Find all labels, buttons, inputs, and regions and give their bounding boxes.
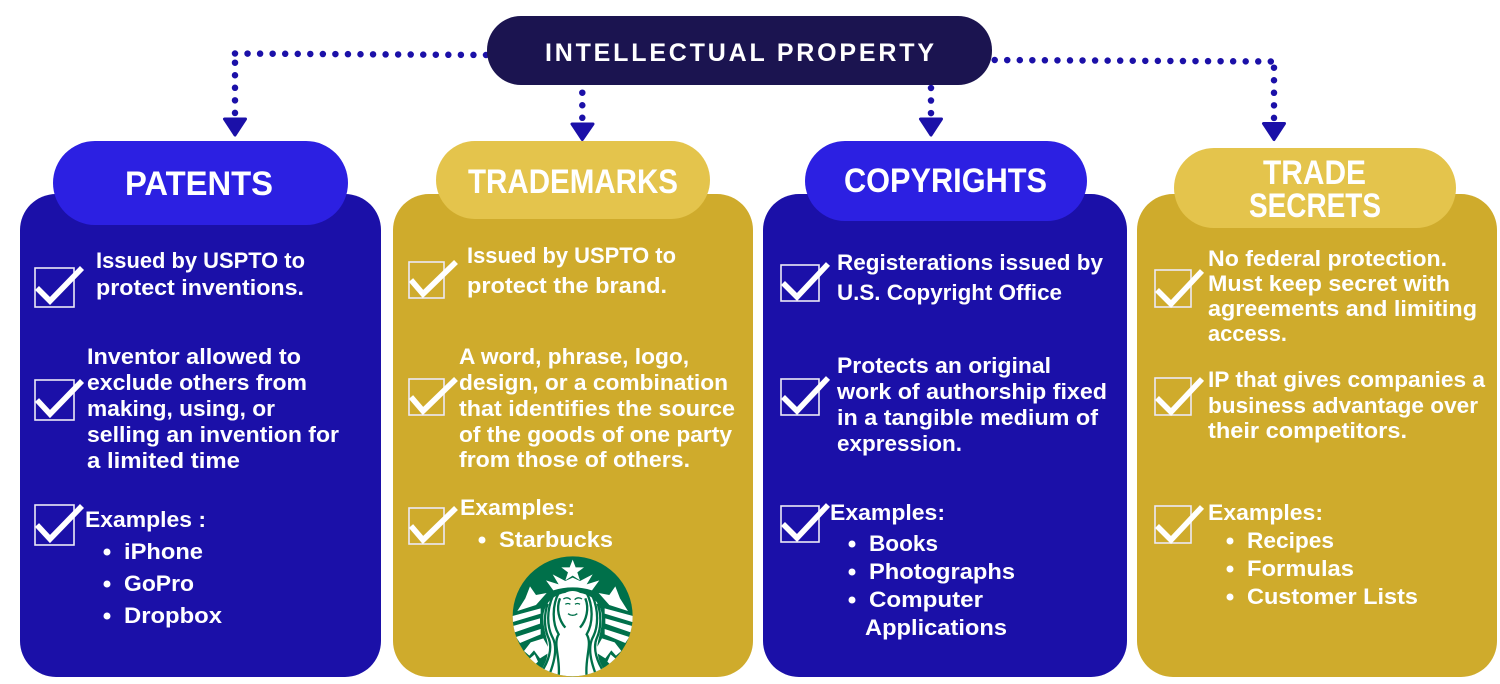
text: no federal protection: Must keep secret with bbox=[1208, 271, 1450, 296]
connector: to copyrights bbox=[920, 88, 942, 135]
text: examples: Examples: bbox=[1208, 500, 1323, 525]
text: advantage: IP that gives companies a bbox=[1208, 367, 1485, 392]
panel: trademarks bbox=[393, 141, 753, 677]
text: inventor: making, using, or bbox=[87, 396, 275, 421]
text: inventor: a limited time bbox=[87, 448, 240, 473]
panel: copyrights bbox=[763, 141, 1127, 677]
checkbox: no federal protection bbox=[1155, 270, 1202, 307]
heading: trademarks: TRADEMARKS bbox=[468, 163, 678, 201]
text: inventor: exclude others from bbox=[87, 370, 307, 395]
text: examples: Applications bbox=[865, 615, 1007, 640]
text: uspto: protect the brand. bbox=[467, 273, 667, 298]
heading: trade secrets: SECRETS bbox=[1249, 187, 1381, 225]
text: uspto: Issued by USPTO to bbox=[96, 248, 305, 273]
text: uspto bbox=[467, 243, 676, 298]
text: examples bbox=[830, 500, 1015, 640]
text: no federal protection: No federal protection. bbox=[1208, 246, 1447, 271]
title: INTELLECTUAL PROPERTY bbox=[545, 39, 934, 67]
connector: to trade secrets bbox=[995, 60, 1284, 140]
text: inventor: selling an invention for bbox=[87, 422, 339, 447]
text: definition: of the goods of one party bbox=[459, 422, 732, 447]
panel: trade secrets bbox=[1137, 148, 1497, 677]
text: inventor: Inventor allowed to bbox=[87, 344, 301, 369]
text: inventor bbox=[87, 344, 339, 473]
text: examples: Photographs bbox=[869, 559, 1015, 584]
heading: patents: PATENTS bbox=[125, 165, 273, 203]
text: no federal protection: access. bbox=[1208, 321, 1287, 346]
checkbox: definition bbox=[409, 379, 456, 415]
text: examples: Dropbox bbox=[124, 603, 223, 628]
text: examples: Examples: bbox=[830, 500, 945, 525]
text: advantage: their competitors. bbox=[1208, 418, 1407, 443]
checkbox: original work bbox=[781, 378, 828, 415]
connector: to trademarks bbox=[572, 93, 593, 140]
text: original work: in a tangible medium of bbox=[837, 405, 1099, 430]
text: examples: iPhone bbox=[124, 539, 203, 564]
title bbox=[487, 16, 992, 85]
text: no federal protection: agreements and limiting bbox=[1208, 296, 1477, 321]
text: examples: GoPro bbox=[124, 571, 194, 596]
text: definition bbox=[459, 344, 735, 472]
text: examples bbox=[85, 507, 223, 628]
text: definition: that identifies the source bbox=[459, 396, 735, 421]
connector: to patents bbox=[224, 54, 487, 135]
checkbox: uspto bbox=[409, 262, 456, 298]
checkbox: examples bbox=[35, 505, 82, 545]
text: examples bbox=[460, 495, 613, 552]
heading: trade secrets: TRADE bbox=[1263, 154, 1366, 192]
checkbox: registrations bbox=[781, 264, 828, 301]
checkbox: uspto bbox=[35, 268, 82, 307]
text: original work bbox=[836, 353, 1107, 456]
heading: trademarks bbox=[436, 141, 710, 219]
text: examples: Customer Lists bbox=[1247, 584, 1418, 609]
text: examples: Formulas bbox=[1247, 556, 1354, 581]
text: examples: Recipes bbox=[1247, 528, 1334, 553]
text: original work: Protects an original bbox=[837, 353, 1051, 378]
text: examples bbox=[1208, 500, 1418, 609]
checkbox: inventor bbox=[35, 380, 82, 420]
text: registrations: U.S. Copyright Office bbox=[837, 280, 1062, 305]
text: examples: Computer bbox=[869, 587, 983, 612]
text: examples: Starbucks bbox=[499, 527, 613, 552]
icon: starbucks logo bbox=[511, 556, 634, 676]
text: registrations: Registerations issued by bbox=[837, 250, 1103, 275]
checkbox: examples bbox=[781, 505, 828, 542]
text: examples: Examples: bbox=[460, 495, 575, 520]
text: no federal protection bbox=[1208, 246, 1477, 346]
text: advantage: business advantage over bbox=[1208, 393, 1478, 418]
checkbox: examples bbox=[409, 508, 456, 544]
text: definition: from those of others. bbox=[459, 447, 690, 472]
text: registrations bbox=[837, 250, 1103, 305]
text: uspto bbox=[96, 248, 305, 300]
heading: patents bbox=[53, 141, 348, 225]
text: advantage bbox=[1208, 367, 1485, 443]
text: uspto: protect inventions. bbox=[96, 275, 304, 300]
text: original work: work of authorship fixed bbox=[836, 379, 1107, 404]
text: original work: expression. bbox=[837, 431, 962, 456]
text: definition: A word, phrase, logo, bbox=[459, 344, 689, 369]
text: examples: Examples : bbox=[85, 507, 206, 532]
heading: copyrights: COPYRIGHTS bbox=[844, 162, 1047, 200]
heading: copyrights bbox=[805, 141, 1087, 221]
text: uspto: Issued by USPTO to bbox=[467, 243, 676, 268]
text: definition: design, or a combination bbox=[459, 370, 728, 395]
heading: trade secrets bbox=[1174, 148, 1456, 228]
checkbox: advantage bbox=[1155, 378, 1202, 415]
text: examples: Books bbox=[869, 531, 938, 556]
checkbox: examples bbox=[1155, 506, 1202, 543]
panel: patents bbox=[20, 141, 381, 677]
